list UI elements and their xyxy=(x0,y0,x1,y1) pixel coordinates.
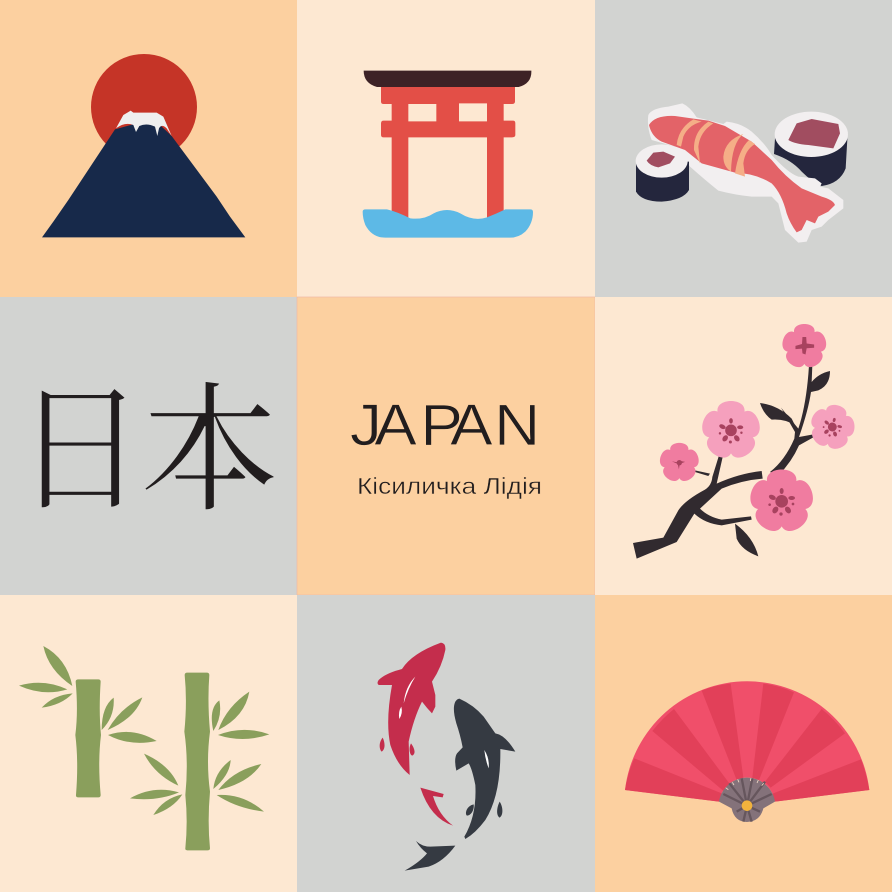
panel: kanji xyxy=(0,297,297,595)
text: kanji nihon: 日 xyxy=(15,336,145,538)
panel: bamboo xyxy=(0,595,297,892)
icon: red sun xyxy=(91,54,197,160)
icon: torii pillars and beams xyxy=(381,86,515,220)
icon: large sushi roll xyxy=(774,112,848,186)
icon: tall bamboo xyxy=(130,673,269,850)
heading: JAPAN: JAPAN xyxy=(350,393,540,457)
panel: torii gate xyxy=(297,0,595,297)
text: kanji nihon xyxy=(15,336,280,540)
icon: blossom large xyxy=(750,469,813,531)
icon: fan leaf xyxy=(625,681,869,802)
text: kanji nihon: 本 xyxy=(140,339,280,540)
panel: mount fuji xyxy=(0,0,297,297)
icon: water xyxy=(363,209,533,238)
icon: short bamboo xyxy=(19,646,157,797)
panel: folding fan xyxy=(595,595,892,892)
icon: fan pin xyxy=(742,800,752,811)
icon: blossom middle xyxy=(702,401,760,458)
icon: blossom right xyxy=(806,400,859,453)
panel: koi fish xyxy=(297,595,595,892)
icon: shrimp nigiri xyxy=(648,103,843,243)
icon: mountain xyxy=(42,111,245,237)
panel: sakura branch xyxy=(595,297,892,595)
panel: sushi xyxy=(595,0,892,297)
text: author name: Кісиличка Лідія xyxy=(357,473,542,499)
icon: dark koi xyxy=(405,699,515,871)
icon: blossom top xyxy=(782,324,826,367)
icon: blossom left xyxy=(660,443,699,481)
icon: red koi xyxy=(377,643,453,826)
icon: mountain snow cap xyxy=(116,111,172,136)
panel: title xyxy=(297,297,595,595)
icon: small sushi roll xyxy=(636,144,689,202)
icon: torii roof xyxy=(364,71,531,87)
icon: branch xyxy=(633,365,830,559)
icon: fan hub xyxy=(719,778,775,822)
